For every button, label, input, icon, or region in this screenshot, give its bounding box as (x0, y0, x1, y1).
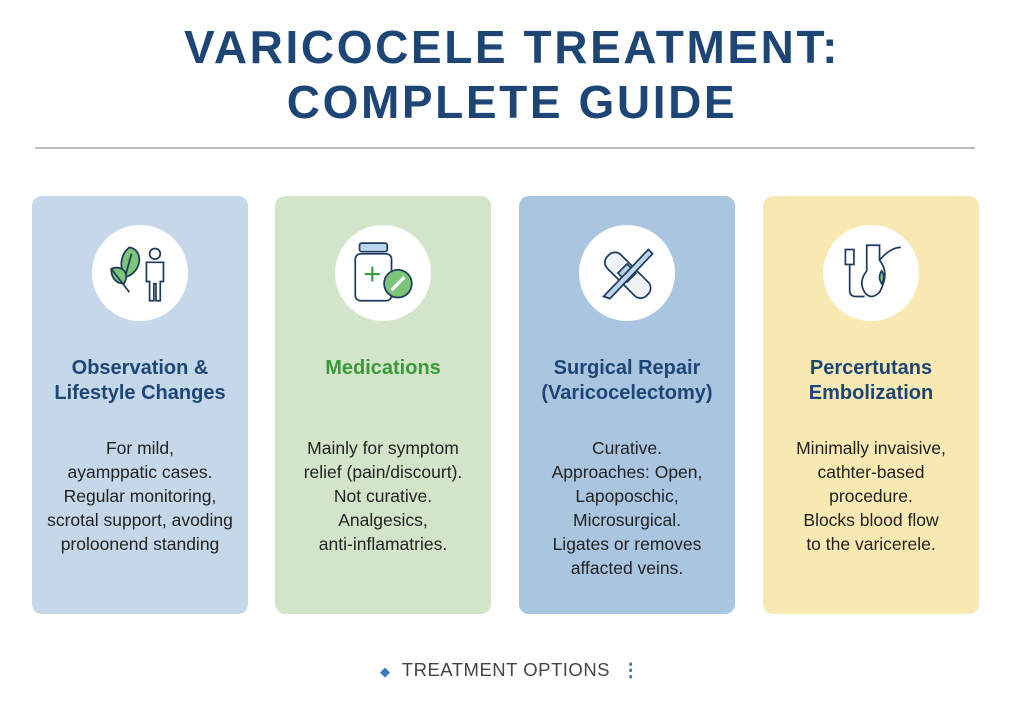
heading: Surgical Repair (554, 357, 700, 379)
heading: Medications (325, 357, 441, 379)
icon: catheter (823, 225, 919, 321)
text (552, 438, 702, 578)
text: Mainly for symptom (307, 438, 459, 458)
panel: observation (32, 196, 248, 614)
text: ayamppatic cases. (68, 462, 212, 482)
heading: Embolization (809, 382, 933, 404)
heading: Observation & (72, 357, 208, 379)
text: Lapoposchic, (575, 486, 679, 506)
heading (809, 357, 933, 404)
title: COMPLETE GUIDE (287, 76, 737, 128)
text: anti-inflamatries. (319, 534, 447, 554)
text: relief (pain/discourt). (304, 462, 462, 482)
text: Analgesics, (338, 510, 428, 530)
text (47, 438, 233, 554)
title: VARICOCELE TREATMENT: (184, 21, 840, 73)
heading: Lifestyle Changes (54, 382, 226, 404)
heading (541, 357, 713, 404)
text: Blocks blood flow (803, 510, 939, 530)
text: proloonend standing (61, 534, 219, 554)
panel: medications (275, 196, 491, 614)
icon: leaf and person (92, 225, 188, 321)
text: Microsurgical. (573, 510, 681, 530)
icon: scalpel and bandage (579, 225, 675, 321)
text: procedure. (829, 486, 913, 506)
panel: surgical (519, 196, 735, 614)
text: cathter-based (817, 462, 924, 482)
panel: embolization (763, 196, 979, 614)
text: to the varicerele. (806, 534, 936, 554)
text: Not curative. (334, 486, 432, 506)
text (796, 438, 946, 554)
text: affacted veins. (571, 558, 683, 578)
text: Minimally invaisive, (796, 438, 946, 458)
footer label: ◆ TREATMENT OPTIONS ⋮ (380, 659, 640, 680)
heading: Percertutans (810, 357, 932, 379)
text: Approaches: Open, (552, 462, 702, 482)
text: For mild, (106, 438, 174, 458)
text: Ligates or removes (553, 534, 701, 554)
text: scrotal support, avoding (47, 510, 233, 530)
heading (54, 357, 226, 404)
text (304, 438, 462, 554)
title (184, 21, 840, 128)
text: Curative. (592, 438, 662, 458)
text: Regular monitoring, (64, 486, 216, 506)
icon: pill bottle (335, 225, 431, 321)
heading: (Varicocelectomy) (541, 382, 713, 404)
